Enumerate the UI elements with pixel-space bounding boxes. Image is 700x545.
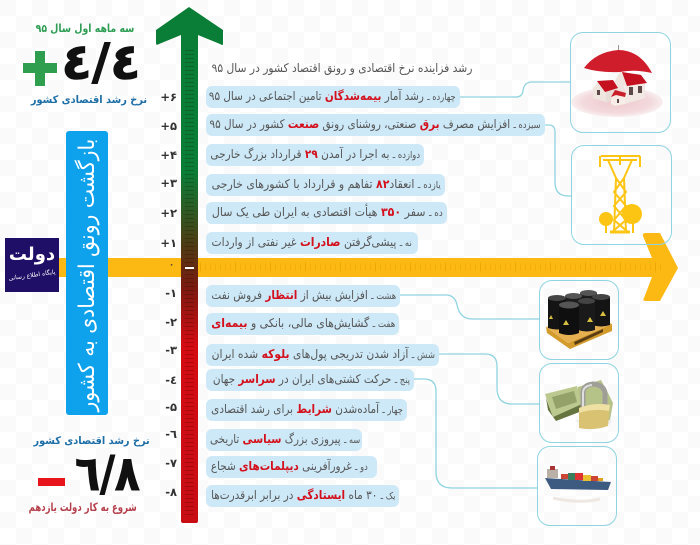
item 6: [206, 344, 439, 366]
scale labels: +۲: [160, 206, 177, 220]
item 4: [206, 399, 407, 421]
item 9: [206, 232, 418, 254]
logo: dolat information base: پایگاه اطلاع رسانی: [8, 269, 56, 282]
item 12: دوازده ـ به اجرا در آمدن ۲۹ قرارداد بزرگ خارجی: [210, 147, 420, 161]
item 5: پنج ـ حرکت کشتی‌های ایران در سراسر جهان: [213, 372, 410, 386]
item 1: [206, 485, 399, 507]
item 11: یازده ـ انعقاد۸۲ تفاهم و قرارداد با کشورهای خارجی: [212, 177, 441, 191]
item 2: [206, 456, 377, 478]
list heading: رشد فزاینده نرخ اقتصادی و رونق اقتصاد کشور در سال ۹۵: [211, 61, 472, 75]
item 10: ده ـ سفر ۳۵۰ هیأت اقتصادی به ایران طی یک سال: [212, 205, 443, 219]
item 7: [206, 313, 399, 335]
stat subtitle: نرخ رشد اقتصادی کشور: [34, 435, 150, 447]
stat caption: first three months: سه ماهه اول سال ۹۵: [36, 22, 134, 35]
scale labels: +۶: [160, 90, 177, 104]
item 7: هفت ـ گشایش‌های مالی، بانکی و بیمه‌ای: [211, 316, 395, 330]
item 13: سیزده ـ افزایش مصرف برق صنعتی، روشنای رونق صنعت کشور در سال ۹۵: [210, 117, 541, 131]
item 2: دو ـ غرورآفرینی دیپلمات‌های شجاع: [211, 459, 368, 473]
bottom stat: starting rate: [29, 435, 150, 514]
logo: dolat information base: [5, 238, 59, 292]
stat subtitle: نرخ رشد اقتصادی کشور: [31, 94, 147, 106]
top stat: growth rate: [23, 22, 147, 106]
stat caption: start of eleventh government: شروع به کار دولت یازدهم: [29, 500, 137, 514]
scale labels: -۲: [165, 315, 177, 329]
card: blocked money: [539, 363, 619, 443]
stat value: ٦/۸: [75, 446, 140, 502]
scale labels: [160, 90, 177, 499]
card: insurance house: [570, 32, 671, 133]
item 4: چهار ـ آماده‌شدن شرایط برای رشد اقتصادی: [211, 402, 403, 416]
card: shipping: [537, 446, 617, 526]
item 3: سه ـ پیروزی بزرگ سیاسی تاریخی: [210, 432, 360, 446]
item 13: [206, 114, 545, 136]
scale labels: +۱: [160, 236, 177, 250]
scale labels: +۴: [160, 148, 177, 162]
item 5: [206, 369, 414, 391]
scale labels: -٦: [165, 427, 177, 441]
card: electricity: [571, 145, 672, 245]
scale labels: -۸: [165, 485, 177, 499]
item 3: [206, 429, 362, 451]
item 10: [206, 202, 447, 224]
scale labels: -۱: [165, 286, 177, 300]
scale labels: ۰: [169, 260, 174, 269]
vertical title panel: بازگشت رونق اقتصادی به کشور: [75, 139, 100, 411]
vertical title panel: [66, 131, 108, 415]
scale labels: +۳: [160, 176, 177, 190]
item 12: [206, 144, 424, 166]
list of achievements: [206, 86, 545, 507]
plus sign: [23, 51, 57, 86]
logo: dolat information base: دولت: [9, 244, 55, 265]
item 8: هشت ـ افزایش بیش از انتظار فروش نفت: [211, 288, 396, 302]
scale labels: -۳: [165, 343, 177, 357]
item 1: یک ـ ۳۰ ماه ایستادگی در برابر ابرقدرت‌ها: [211, 488, 395, 502]
item 14: [206, 86, 460, 108]
item 8: [206, 285, 400, 307]
item 11: [206, 174, 445, 196]
scale labels: +۵: [160, 119, 177, 133]
scale labels: -۵: [165, 400, 177, 414]
item 6: شش ـ آزاد شدن تدریجی پول‌های بلوکه شده ایران: [212, 347, 435, 361]
scale labels: -٤: [165, 373, 177, 387]
stat value: ٤/٤: [61, 33, 141, 91]
item 14: چهارده ـ رشد آمار بیمه‌شدگان تامین اجتماعی در سال ۹۵: [209, 89, 456, 103]
item 9: نه ـ پیشی‌گرفتن صادرات غیر نفتی از واردات: [212, 235, 412, 249]
scale labels: -۷: [165, 456, 177, 470]
minus sign: [38, 478, 65, 486]
card: oil: [539, 280, 619, 360]
